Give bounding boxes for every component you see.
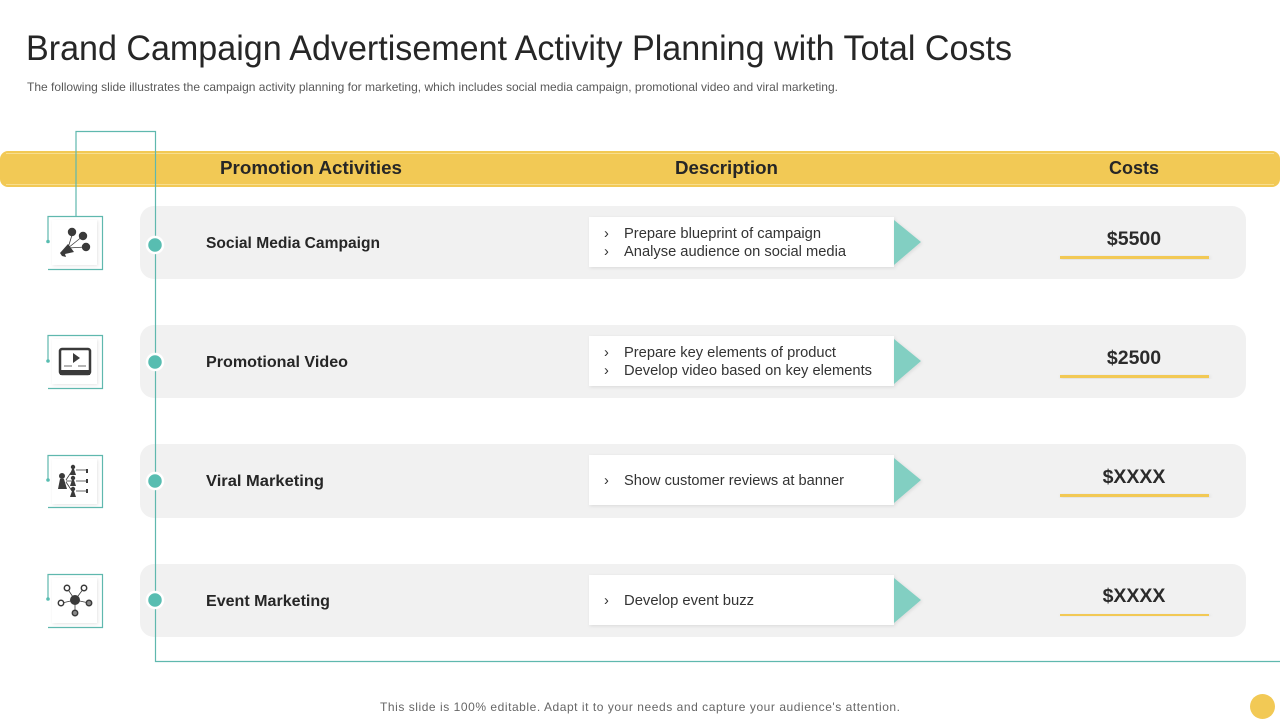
description box: Prepare blueprint of campaign [624, 226, 821, 242]
description box: › [604, 363, 609, 379]
cost: $XXXX [1103, 466, 1165, 488]
description box [589, 575, 894, 625]
description box: › [604, 345, 609, 361]
header: description: Description [675, 157, 778, 178]
icon: event network [46, 574, 102, 628]
header: costs: Costs [1109, 157, 1159, 178]
icon: video player [46, 336, 102, 388]
description box [589, 336, 894, 386]
cost: $2500 [1107, 347, 1161, 369]
row: viral marketing [140, 444, 1246, 518]
description box: Prepare key elements of product [624, 345, 836, 361]
title: Brand Campaign Advertisement Activity Planning with Total Costs [26, 29, 1012, 68]
activity name: Social Media Campaign [206, 235, 380, 252]
description box [589, 217, 894, 267]
description box: › [604, 473, 609, 489]
page badge [1250, 694, 1275, 719]
cost [1060, 347, 1209, 378]
activity name: Event Marketing [206, 593, 330, 610]
arrow [894, 458, 921, 503]
description box: › [604, 593, 609, 609]
footer note: This slide is 100% editable. Adapt it to your needs and capture your audience's attention. [380, 700, 900, 714]
header: promotion activities: Promotion Activities [220, 157, 402, 178]
timeline connector [76, 132, 1280, 662]
table header bar [0, 151, 1280, 187]
description box: Develop event buzz [624, 593, 754, 609]
row: event marketing [140, 564, 1246, 637]
description box: › [604, 244, 609, 260]
row: promotional video [140, 325, 1246, 398]
description box [589, 455, 894, 505]
activity name: Promotional Video [206, 354, 348, 371]
icon: social media megaphone [46, 216, 102, 270]
description box: › [604, 226, 609, 242]
arrow [894, 339, 921, 384]
arrow [894, 220, 921, 265]
description box: Develop video based on key elements [624, 363, 872, 379]
row: social media campaign [140, 206, 1246, 279]
arrow [894, 578, 921, 623]
cost: $XXXX [1103, 585, 1165, 607]
activity name: Viral Marketing [206, 473, 324, 490]
description box: Analyse audience on social media [624, 244, 847, 260]
icon: viral people tree [46, 456, 102, 508]
cost [1060, 228, 1209, 259]
subtitle: The following slide illustrates the campaign activity planning for marketing, which includes social media campaign, promotional video and viral marketing. [27, 80, 838, 94]
cost [1060, 466, 1209, 497]
timeline nodes [147, 237, 163, 608]
description box: Show customer reviews at banner [624, 473, 844, 489]
cost: $5500 [1107, 228, 1161, 250]
